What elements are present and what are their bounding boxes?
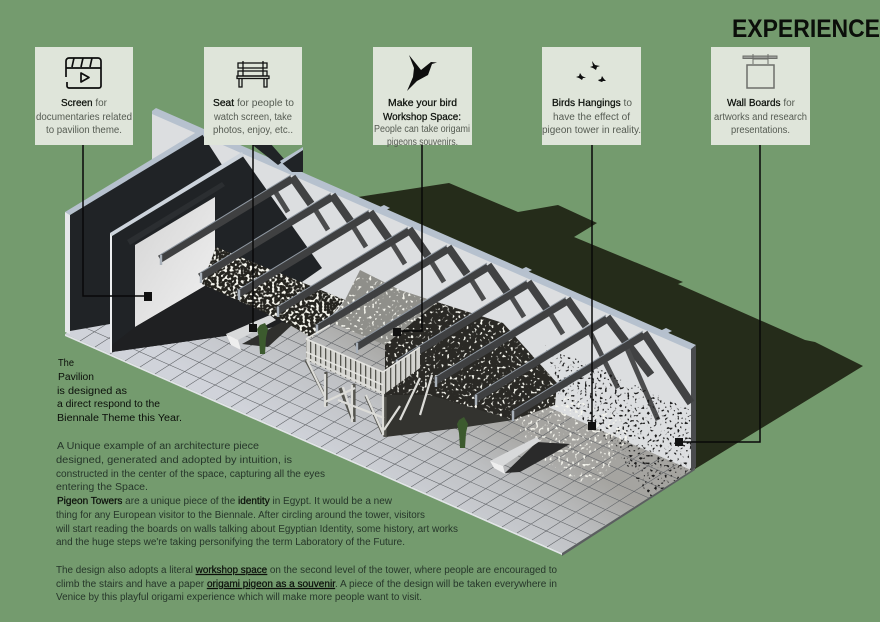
panel: screen xyxy=(35,47,133,145)
hanging birds, light gap xyxy=(330,270,437,345)
icon: film clapper xyxy=(66,58,101,88)
timber pigeon tower xyxy=(306,325,432,437)
text block: description: A Unique example of an architecture piece xyxy=(57,441,259,452)
first gable wall xyxy=(65,130,224,334)
text block: intro: a direct respond to the xyxy=(57,399,160,410)
text block: intro: is designed as xyxy=(57,386,127,397)
text block: description: constructed in the center of the space, capturing all the eyes xyxy=(56,469,325,480)
text block: workshop xyxy=(56,565,557,603)
visitor figure xyxy=(257,323,268,354)
panel: bird hangings: have the effect of xyxy=(553,112,630,123)
panel: screen: documentaries related xyxy=(36,112,132,123)
panel: wall boards xyxy=(711,47,810,145)
leader line: wall boards xyxy=(675,145,760,446)
panel: bird hangings: Birds Hangings to xyxy=(552,98,632,109)
seat near screen xyxy=(226,315,292,350)
panel: bird hangings xyxy=(542,47,641,145)
icon: bench xyxy=(237,61,269,87)
leader line: screen xyxy=(83,145,152,301)
text block: description: and the huge steps we're taking personifying the term Laboratory of the Future. xyxy=(56,537,405,548)
icon: hanging sign xyxy=(743,54,777,88)
text block: workshop: The design also adopts a literal workshop space on the second level of the tower, where people are encouraged to xyxy=(56,565,557,576)
rafter shadows on wall xyxy=(292,177,691,403)
panel: seat: Seat for people to xyxy=(213,98,294,109)
panel: seat xyxy=(204,47,302,145)
panel: seat: photos, enjoy, etc.. xyxy=(213,125,293,136)
cast shadow on ground xyxy=(358,183,863,469)
panel: workshop: Workshop Space: xyxy=(383,112,461,123)
icon: three birds xyxy=(576,61,606,82)
text block: intro xyxy=(57,358,182,424)
leader line: seat xyxy=(249,145,257,332)
text block: description: Pigeon Towers are a unique piece of the identity in Egypt. It would be a new xyxy=(57,496,393,507)
panel: wall boards: Wall Boards for xyxy=(727,98,796,109)
icon: origami bird xyxy=(407,55,437,91)
roof rafters xyxy=(160,175,644,421)
back wall xyxy=(152,108,696,471)
tiled floor xyxy=(65,251,695,556)
panel: wall boards: artworks and research xyxy=(714,112,807,123)
hanging birds, dense left field xyxy=(202,247,345,338)
panel: wall boards: presentations. xyxy=(731,125,790,136)
isometric pavilion diagram xyxy=(65,108,696,556)
text block: description: designed, generated and adopted by intuition, is xyxy=(56,455,292,466)
panel: screen: Screen for xyxy=(61,98,108,109)
text block: description: thing for any European visitor to the Biennale. After circling around the tower, visitors xyxy=(56,510,425,521)
panel: seat: watch screen, take xyxy=(213,112,292,123)
visitor figure xyxy=(457,417,468,448)
panel: workshop xyxy=(373,47,472,148)
panel: workshop: pigeons souvenirs. xyxy=(387,137,458,148)
second gable wall with wall shadow xyxy=(110,152,322,353)
panel: workshop: Make your bird xyxy=(388,98,457,109)
tower cast shadow xyxy=(383,360,513,437)
leader line: workshop xyxy=(393,145,422,336)
text block: description xyxy=(55,441,458,548)
text block: description: entering the Space. xyxy=(56,482,148,493)
leader line: bird hangings xyxy=(588,145,596,430)
panel: workshop: People can take origami xyxy=(374,124,470,135)
text block: workshop: climb the stairs and have a paper origami pigeon as a souvenir. A piece of the design will be taken everywhere in xyxy=(56,579,557,590)
hanging birds, black on wall xyxy=(545,345,691,497)
hanging birds, right field xyxy=(385,302,557,420)
rear gable piece xyxy=(250,143,303,172)
panel: bird hangings: pigeon tower in reality. xyxy=(542,125,641,136)
seat near wall xyxy=(490,437,570,474)
text block: intro: The xyxy=(58,358,74,369)
text block: intro: Pavilion xyxy=(58,372,94,383)
white birds on floor xyxy=(512,395,630,482)
projection screen xyxy=(135,197,215,327)
dark floor shadow xyxy=(112,262,330,352)
text block: workshop: Venice by this playful origami experience which will make more people want to visit. xyxy=(56,592,422,603)
text block: intro: Biennale Theme this Year. xyxy=(57,413,182,424)
panel: screen: to pavilion theme. xyxy=(46,125,122,136)
text block: description: will start reading the boards on walls talking about Egyptian Identity, some history, art works xyxy=(55,524,458,535)
